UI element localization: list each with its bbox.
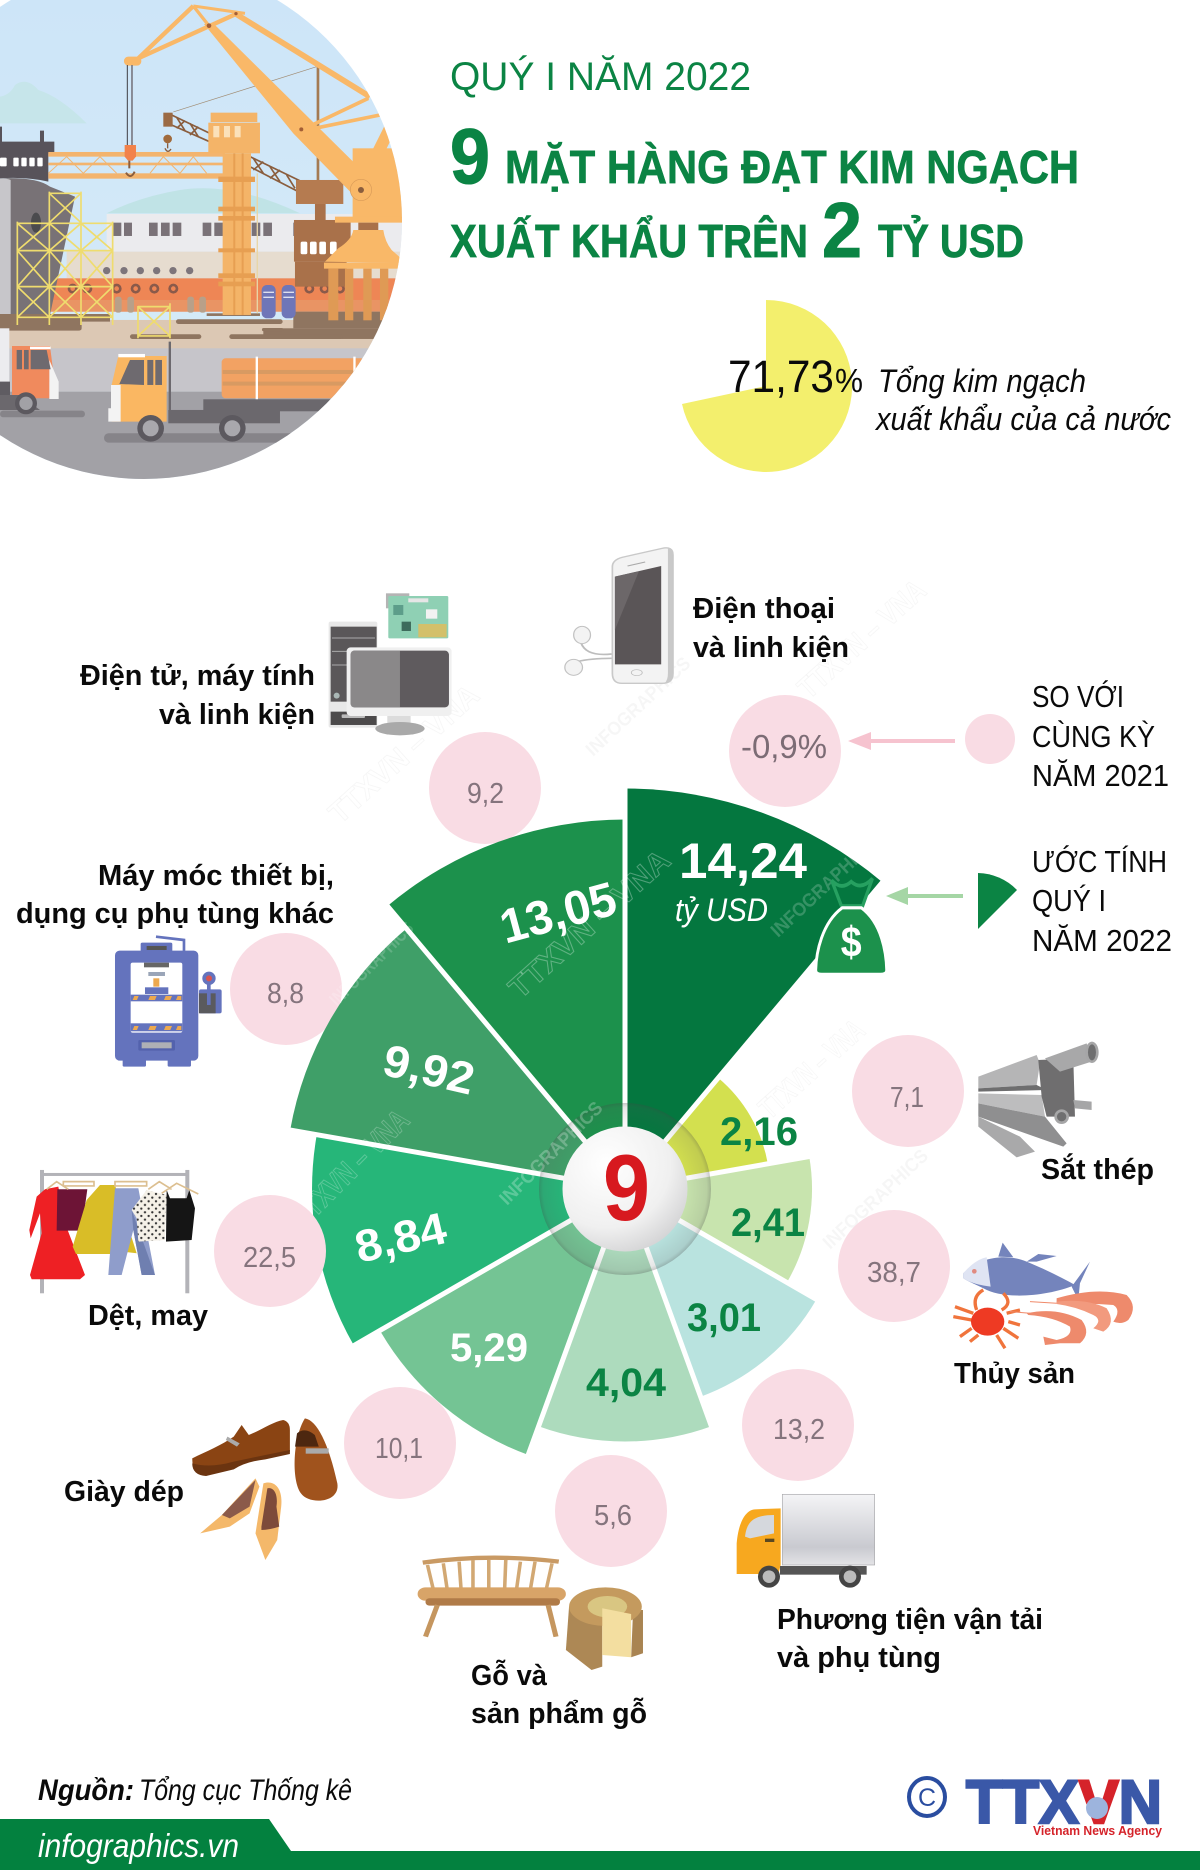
chart values: 3,01 [687, 1296, 761, 1340]
label: seafood: Thủy sản [954, 1358, 1075, 1390]
icon: press machine [115, 937, 222, 1067]
legend pink circle [965, 714, 1015, 764]
scaffolding [17, 192, 170, 338]
watermarks: TTXVN – VNA [287, 1104, 416, 1233]
arrow: green [886, 887, 963, 905]
legend: growth [848, 679, 1169, 793]
icon: wooden bench and stump [418, 1558, 643, 1670]
legend text [1032, 844, 1172, 958]
chart values: 14,24 [679, 833, 807, 889]
chart values: 9,92 [378, 1034, 479, 1105]
watermarks: INFOGRAPHICS [582, 653, 695, 761]
watermarks: TTXVN – VNA [792, 574, 933, 705]
wedge: seafood 2.41 [625, 1156, 812, 1282]
chart values: tỷ USD [675, 892, 768, 928]
chart values: 5,29 [450, 1326, 528, 1370]
wedge: machinery 9.92 [290, 929, 625, 1189]
watermarks [287, 574, 933, 1254]
icon: clothes on a rack [29, 1170, 198, 1293]
growth circles with values: 10,1 [375, 1433, 423, 1465]
label: machinery: dụng cụ phụ tùng khác [16, 898, 334, 930]
center ring and number 9: 9 [603, 1135, 650, 1240]
footer band [0, 1819, 1200, 1870]
growth circles with values: 7,1 [890, 1082, 924, 1114]
label: transport [777, 1604, 1043, 1674]
arrow: pink [848, 732, 955, 750]
label: electronics [80, 660, 315, 731]
wedge: footwear 5.29 [380, 1189, 625, 1455]
watermarks: TTXVN – VNA [753, 1014, 871, 1125]
legend text [1032, 679, 1169, 793]
wedge: phones 14.24 [625, 788, 882, 1189]
log truck [104, 433, 297, 443]
label: phones: Điện thoại [693, 593, 835, 625]
headline line 2: XUẤT KHẨU TRÊN [450, 215, 808, 267]
headline line 1: MẶT HÀNG ĐẠT KIM NGẠCH [505, 141, 1079, 193]
label: wood: Gỗ và [471, 1658, 548, 1692]
icon: shoes [192, 1418, 338, 1560]
subtitle: QUÝ I NĂM 2022 [450, 54, 751, 99]
source line [38, 1774, 352, 1807]
orange truck [0, 328, 9, 382]
headline line 1: 9 [450, 112, 490, 200]
pie caption: Tổng kim ngạch [878, 363, 1086, 399]
logo: TTXVN: C [918, 1784, 936, 1812]
watermarks: INFOGRAPHICS [819, 1146, 933, 1254]
label: transport: Phương tiện vận tải [777, 1604, 1043, 1636]
wedge: electronics 13.05 [388, 820, 625, 1189]
icon: computer [329, 593, 452, 735]
label: steel: Sắt thép [1041, 1152, 1154, 1186]
growth circles with values [214, 695, 964, 1567]
percent value: 71,73 [728, 351, 834, 402]
label: machinery [16, 860, 334, 930]
pie caption [874, 363, 1171, 437]
wedge: wood 4.04 [539, 1189, 711, 1442]
chart values: 13,05 [495, 873, 622, 954]
growth circles behind the chart [230, 732, 541, 1499]
watermarks: INFOGRAPHICS [767, 834, 880, 942]
illustration: port scene with cranes and trucks [0, 0, 420, 492]
logo: TTXVN: Vietnam News Agency [1033, 1823, 1163, 1838]
growth circles with values: 22,5 [243, 1242, 296, 1274]
chart values [350, 833, 807, 1405]
headline line 2 [450, 186, 1024, 274]
legend text: ƯỚC TÍNH [1032, 844, 1167, 879]
pie chart: 71.73 percent share [682, 300, 1171, 472]
growth circles with values: 38,7 [867, 1257, 921, 1289]
icon: money bag: $ [841, 919, 862, 966]
title block [450, 54, 1079, 274]
icon: money bag [816, 878, 887, 974]
label: footwear: Giày dép [64, 1476, 184, 1508]
bollards [115, 297, 206, 313]
pie caption: xuất khẩu của cả nước [874, 401, 1171, 437]
label: phones [693, 593, 849, 664]
growth circles with values: 9,2 [467, 778, 504, 810]
legend: estimate [886, 844, 1172, 958]
source line: Tổng cục Thống kê [139, 1774, 352, 1807]
legend text: NĂM 2022 [1032, 923, 1172, 958]
icon: smartphone with earphones [565, 548, 673, 683]
big crane [138, 6, 380, 132]
watermarks: INFOGRAPHICS [496, 1098, 607, 1210]
logo: TTXVN: TTXVN [966, 1768, 1162, 1836]
center ring and number 9 [539, 1103, 711, 1275]
chart values: 4,04 [586, 1361, 667, 1405]
headline line 2: TỶ USD [878, 215, 1024, 267]
headline line 1 [450, 112, 1079, 200]
grab [296, 180, 343, 204]
blue tanks [262, 285, 296, 318]
watermarks: TTXVN – VNA [323, 679, 486, 830]
icon: delivery truck [737, 1494, 875, 1588]
growth circles with values: -0,9% [741, 728, 827, 765]
headline line 2: 2 [822, 186, 862, 274]
chart values: 8,84 [350, 1202, 451, 1273]
percent value: % [835, 362, 863, 399]
ground [9, 320, 382, 350]
radial chart: nine export wedges [286, 784, 885, 1459]
legend text: SO VỚI [1032, 679, 1124, 714]
growth circles with values: 8,8 [267, 978, 304, 1010]
wedge: steel 2.16 [625, 1078, 768, 1189]
legend text: NĂM 2021 [1032, 758, 1169, 793]
label: wood: sản phẩm gỗ [471, 1696, 647, 1730]
icon: fish, crab and shrimp [953, 1243, 1133, 1348]
label: wood [471, 1658, 647, 1730]
wedge: transport 3.01 [625, 1189, 816, 1397]
tower crane [172, 115, 302, 192]
label: electronics: Điện tử, máy tính [80, 660, 315, 692]
chart values: 2,16 [720, 1110, 798, 1154]
chart values: 2,41 [731, 1201, 805, 1245]
label: textile: Dệt, may [88, 1300, 208, 1332]
ship hull [0, 178, 75, 315]
growth circles with values: 13,2 [773, 1414, 825, 1446]
icon: steel profiles [978, 1042, 1099, 1157]
watermarks: TTXVN – VNA [503, 844, 677, 1005]
label: electronics: và linh kiện [159, 699, 315, 731]
footer band: infographics.vn [38, 1827, 239, 1864]
legend text: QUÝ I [1032, 883, 1106, 918]
source line: Nguồn: [38, 1774, 134, 1807]
legend text: CÙNG KỲ [1032, 719, 1155, 754]
label: phones: và linh kiện [693, 632, 849, 664]
wedge: textile 8.84 [312, 1135, 625, 1346]
growth circles with values: 5,6 [594, 1500, 632, 1532]
label: machinery: Máy móc thiết bị, [98, 860, 334, 892]
legend green wedge [978, 873, 1017, 929]
watermarks: INFOGRAPHICS [326, 918, 418, 1011]
label: transport: và phụ tùng [777, 1642, 941, 1674]
